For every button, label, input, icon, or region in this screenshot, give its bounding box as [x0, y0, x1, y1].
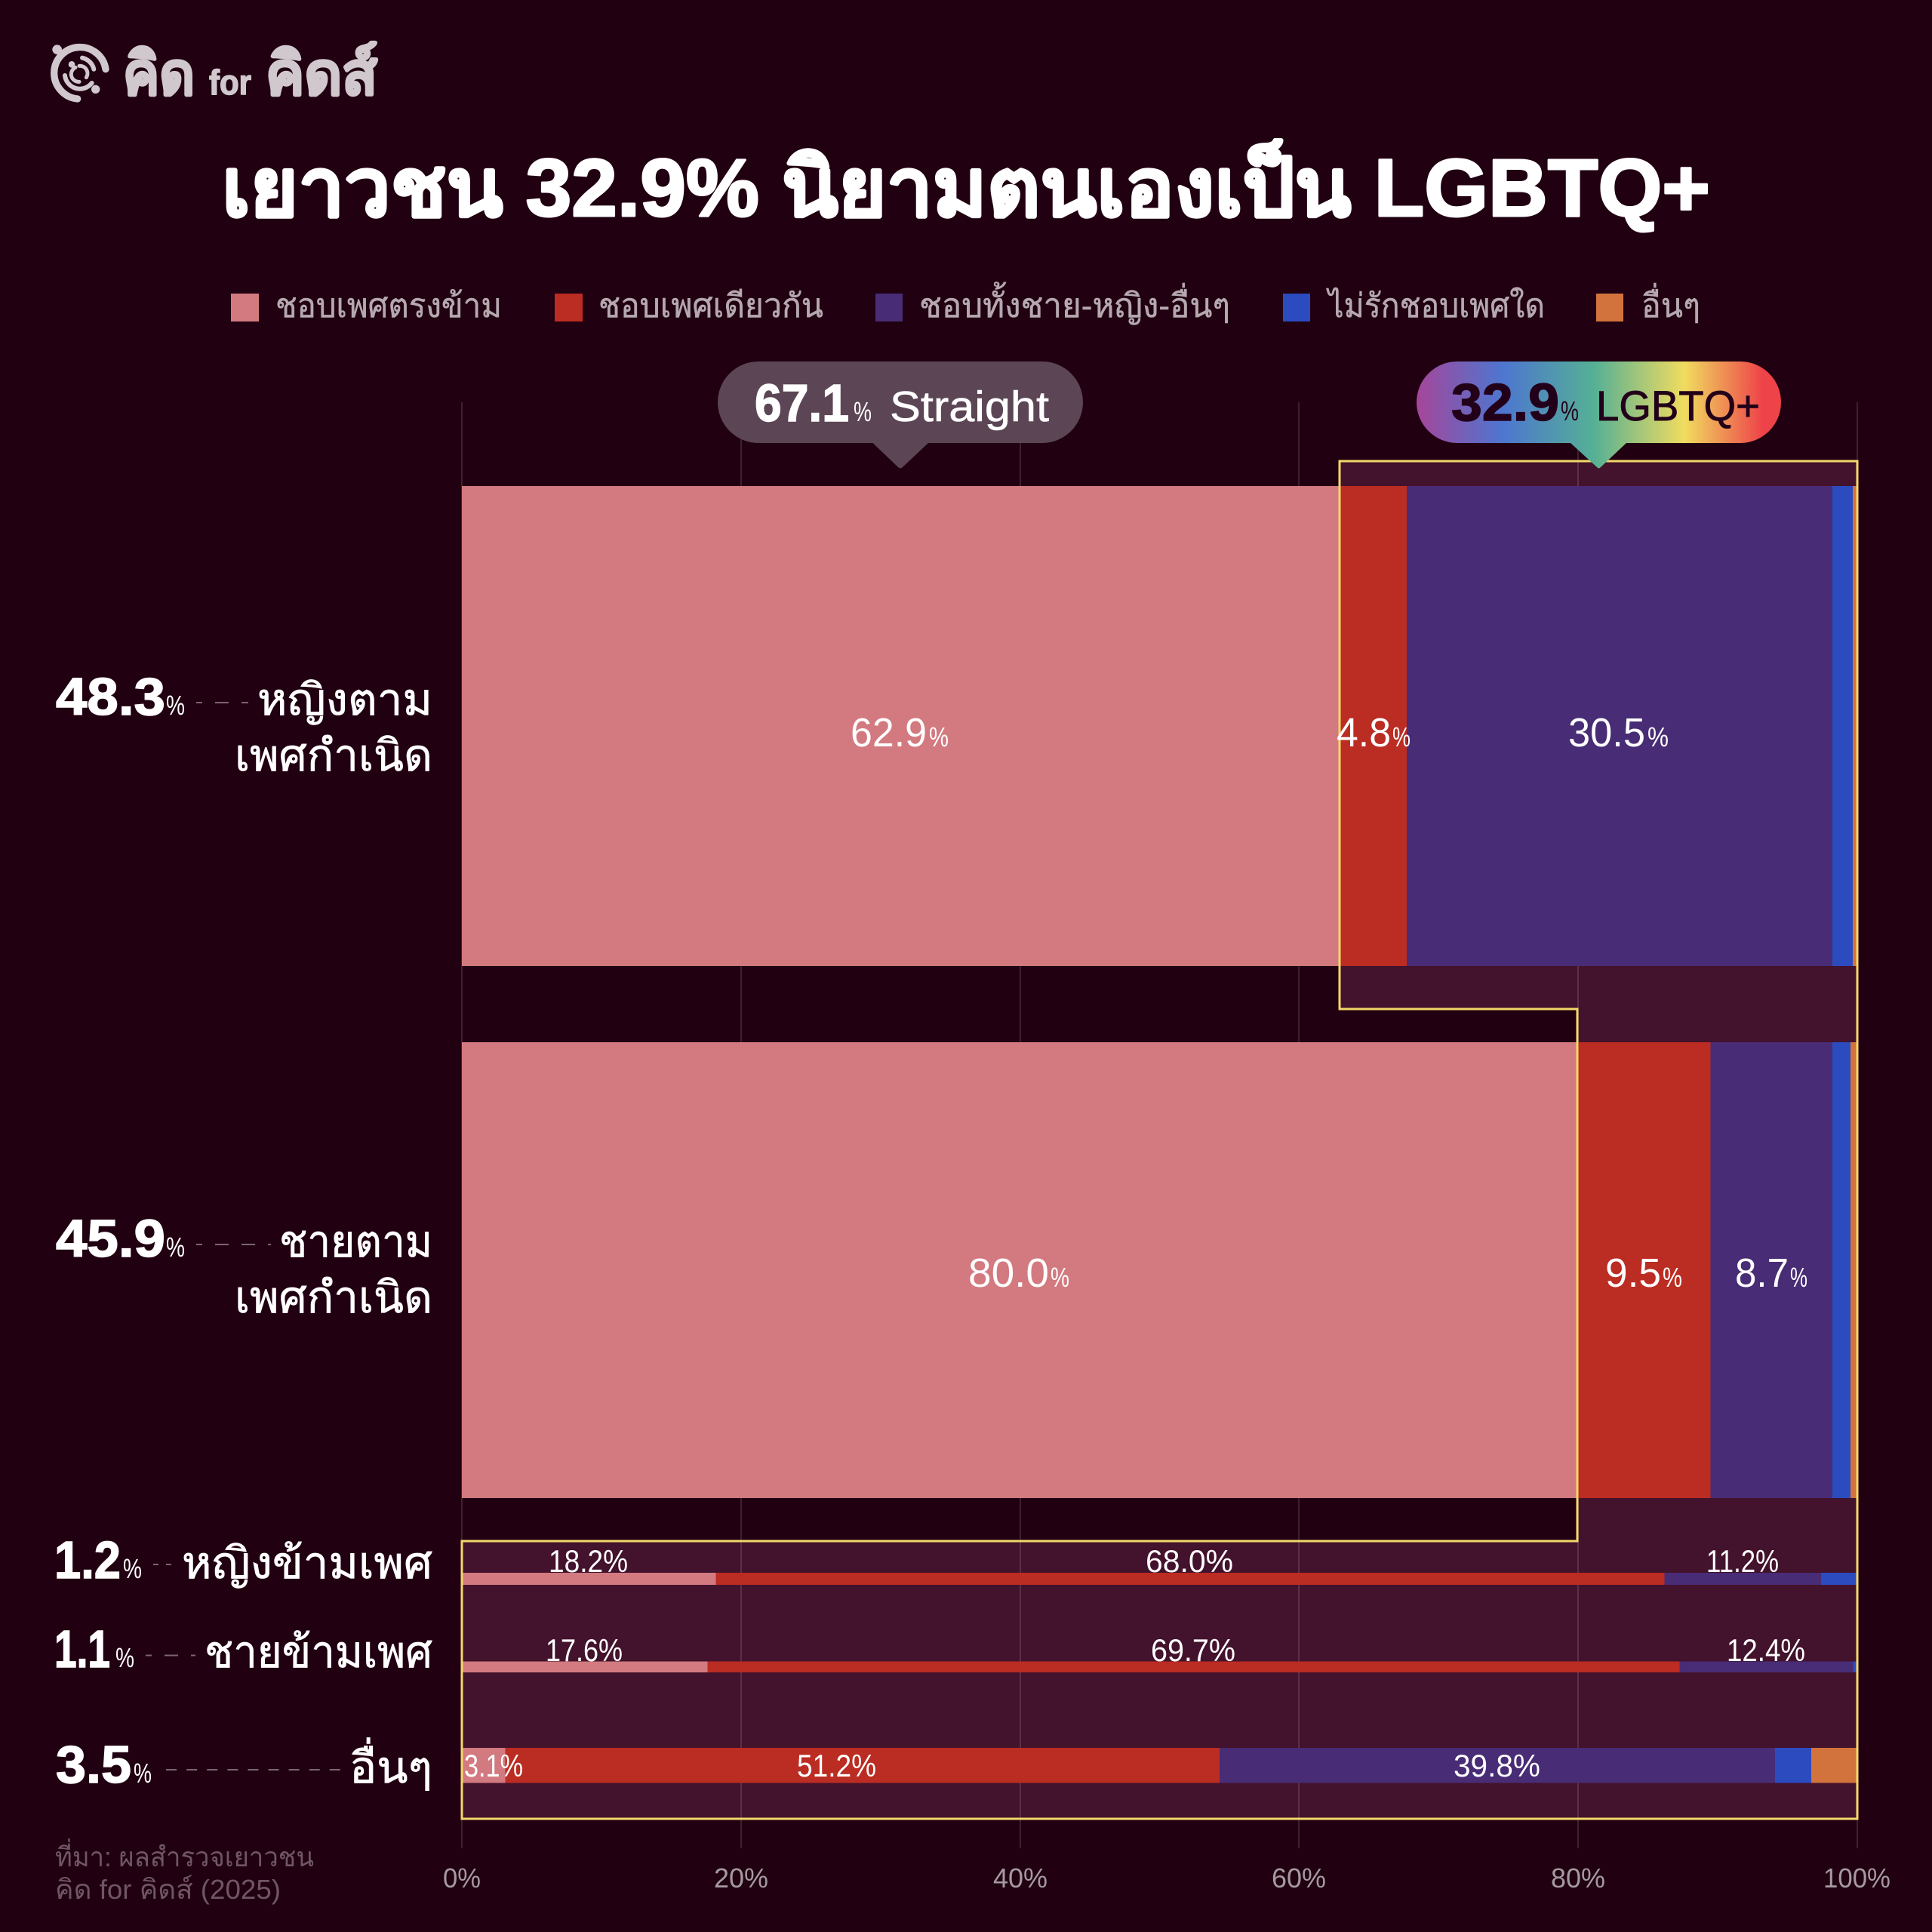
row label: 45.9% ชายตามเพศกำเนิด [56, 1209, 432, 1322]
row label: 1.1% ชายข้ามเพศ: ชายข้ามเพศ [205, 1628, 432, 1677]
row label: 48.3% หญิงตามเพศกำเนิด [56, 667, 432, 780]
row label: 1.1% ชายข้ามเพศ: 1.1 [54, 1620, 110, 1678]
values: ชายข้ามเพศ row [546, 1632, 1805, 1668]
row label: 48.3% หญิงตามเพศกำเนิด: เพศกำเนิด [235, 731, 432, 780]
source note: คิด for คิดส์ (2025) [55, 1874, 281, 1905]
x axis labels: 0% [443, 1863, 481, 1894]
logo: คิด for คิดส์ [52, 41, 377, 107]
callout: 67.1% Straight: % [854, 396, 872, 427]
row labels [54, 667, 432, 1794]
row label: 45.9% ชายตามเพศกำเนิด: 45.9 [56, 1209, 165, 1268]
logo wordmark [123, 41, 377, 107]
values: ชายข้ามเพศ row: 12.4% [1727, 1632, 1805, 1668]
icon: orbit logo mark [52, 45, 106, 99]
row label: 1.2% หญิงข้ามเพศ: % [123, 1553, 142, 1584]
legend item: straight: ชอบเพศตรงข้าม [275, 288, 502, 325]
row label: 1.2% หญิงข้ามเพศ [54, 1531, 432, 1589]
x axis labels [443, 1863, 1890, 1894]
value: 62.9%: 62.9 [851, 710, 927, 755]
callout: 32.9% LGBTQ+: 32.9 [1451, 373, 1559, 432]
logo wordmark: คิด [123, 41, 195, 107]
LGBTQ+ highlighted region fill [462, 461, 1857, 1819]
legend item: both: ชอบทั้งชาย-หญิง-อื่นๆ [919, 281, 1230, 325]
x axis labels: 100% [1823, 1863, 1890, 1894]
value: 9.5%: % [1663, 1262, 1682, 1293]
LGBTQ+ region outline [462, 461, 1857, 1819]
values: ชายข้ามเพศ row: 17.6% [546, 1632, 623, 1668]
title: เยาวชน 32.9% นิยามตนเองเป็น LGBTQ+ [222, 139, 1710, 233]
legend item: same sex: ชอบเพศเดียวกัน [598, 288, 823, 325]
values: หญิงข้ามเพศ row: 11.2% [1706, 1543, 1779, 1579]
value: 8.7%: % [1790, 1262, 1807, 1293]
stacked bar: ชายข้ามเพศ [462, 1662, 1857, 1672]
values: หญิงข้ามเพศ row: 68.0% [1146, 1543, 1233, 1579]
source note: ที่มา: ผลสำรวจเยาวชน [55, 1838, 314, 1872]
row label: 1.2% หญิงข้ามเพศ: หญิงข้ามเพศ [182, 1539, 432, 1588]
value: 80.0%: 80.0 [968, 1251, 1049, 1296]
row label: 45.9% ชายตามเพศกำเนิด: เพศกำเนิด [235, 1273, 432, 1322]
row label: 48.3% หญิงตามเพศกำเนิด: % [166, 690, 185, 721]
callout: 32.9% LGBTQ+ [1417, 361, 1781, 468]
value: 80.0%: % [1051, 1262, 1069, 1293]
x axis labels: 60% [1272, 1863, 1326, 1894]
legend item: other: อื่นๆ [1641, 282, 1700, 325]
row label: 45.9% ชายตามเพศกำเนิด: ชายตาม [279, 1217, 432, 1266]
logo wordmark: คิดส์ [266, 41, 377, 107]
row label: 1.1% ชายข้ามเพศ: % [115, 1642, 134, 1673]
row label: 48.3% หญิงตามเพศกำเนิด: หญิงตาม [257, 675, 432, 724]
values: หญิงข้ามเพศ row [549, 1543, 1779, 1579]
value: 30.5%: % [1647, 721, 1669, 752]
logo wordmark: for [209, 63, 251, 102]
row label: 48.3% หญิงตามเพศกำเนิด: 48.3 [56, 667, 165, 726]
row label: 45.9% ชายตามเพศกำเนิด: % [166, 1232, 185, 1263]
callout: 32.9% LGBTQ+: LGBTQ+ [1596, 382, 1760, 429]
values: อื่นๆ row: 39.8% [1454, 1748, 1540, 1783]
value: 4.8%: 4.8 [1337, 710, 1391, 755]
row label: 3.5% อื่นๆ: อื่นๆ [349, 1737, 432, 1792]
value: 9.5%: 9.5 [1605, 1251, 1661, 1296]
callout: 32.9% LGBTQ+: % [1561, 395, 1579, 426]
x axis labels: 20% [714, 1863, 768, 1894]
values: อื่นๆ row: 51.2% [797, 1748, 876, 1783]
values: หญิงข้ามเพศ row: 18.2% [549, 1543, 628, 1579]
value: 30.5%: 30.5 [1568, 710, 1645, 755]
stacked bar: หญิงตามเพศกำเนิด [462, 486, 1857, 966]
x axis labels: 40% [993, 1863, 1048, 1894]
source note [55, 1838, 314, 1905]
x axis labels: 80% [1551, 1863, 1605, 1894]
row label: 1.2% หญิงข้ามเพศ: 1.2 [54, 1531, 121, 1589]
callout: 67.1% Straight: Straight [890, 383, 1049, 431]
legend item: other [1596, 282, 1700, 325]
value: 8.7%: 8.7 [1735, 1251, 1789, 1296]
stacked bar: ชายตามเพศกำเนิด [462, 1042, 1857, 1498]
values: ชายข้ามเพศ row: 69.7% [1151, 1632, 1235, 1668]
bar value labels [464, 710, 1807, 1783]
legend item: none: ไม่รักชอบเพศใด [1326, 287, 1545, 325]
value: 62.9%: % [929, 721, 949, 752]
stacked bar: อื่นๆ [462, 1748, 1857, 1783]
row label: 3.5% อื่นๆ: % [134, 1758, 152, 1789]
callout: 67.1% Straight: 67.1 [755, 374, 849, 432]
row label: 3.5% อื่นๆ: 3.5 [56, 1735, 131, 1794]
callout: 67.1% Straight [718, 361, 1083, 468]
row label: 1.1% ชายข้ามเพศ [54, 1620, 432, 1678]
legend [231, 281, 1700, 325]
row label: 3.5% อื่นๆ [56, 1735, 432, 1794]
values: อื่นๆ row: 3.1% [464, 1748, 523, 1783]
value: 4.8%: % [1392, 721, 1411, 752]
stacked bar: หญิงข้ามเพศ [462, 1573, 1857, 1585]
values: อื่นๆ row [464, 1748, 1540, 1783]
